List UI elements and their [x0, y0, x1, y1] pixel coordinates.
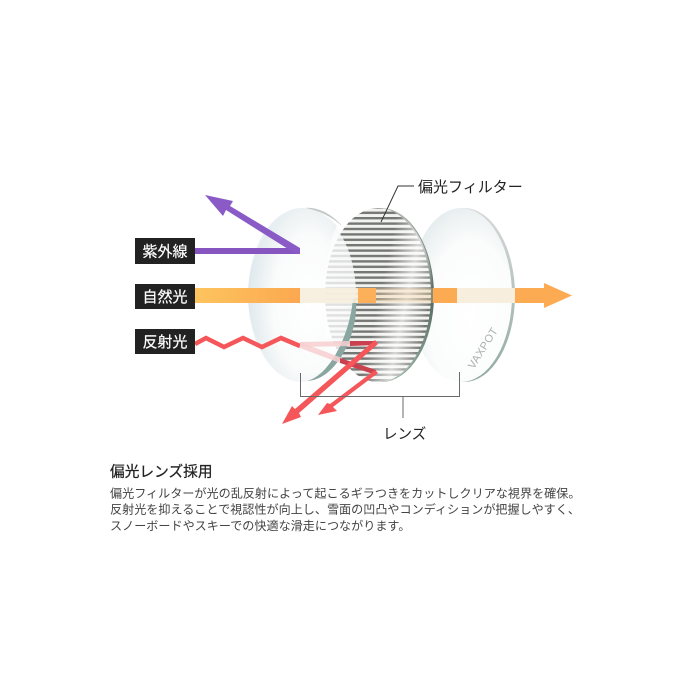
left lens	[248, 208, 356, 382]
right lens	[410, 208, 515, 382]
purple ray: UV	[195, 195, 300, 254]
lens bracket	[300, 372, 460, 418]
body text: 偏光フィルターが光の乱反射によって起こるギラつきをカットしクリアな視界を確保。	[110, 486, 580, 500]
orange ray: natural light	[195, 283, 572, 308]
body text: スノーボードやスキーでの快適な滑走につながります。	[110, 518, 410, 533]
polarizing filter	[325, 208, 434, 382]
tag: natural light: 自然光	[142, 289, 188, 306]
body text: 反射光を抑えることで視認性が向上し、雪面の凹凸やコンディションが把握しやすく、	[110, 502, 580, 516]
lens rim, lower right	[307, 298, 356, 381]
red ray: reflected light	[195, 338, 378, 424]
lens brand mark: VAXPOT	[466, 326, 501, 371]
tag: UV: 紫外線	[142, 244, 188, 260]
tag: reflected light	[135, 329, 195, 354]
tag: natural light	[135, 284, 195, 309]
tag: UV	[135, 238, 195, 264]
body text	[110, 486, 580, 533]
label: lens: レンズ	[383, 426, 426, 443]
lens rim, top	[307, 208, 341, 225]
filter leader line	[381, 186, 414, 222]
tag: reflected light: 反射光	[142, 334, 188, 351]
heading: 偏光レンズ採用	[110, 464, 213, 480]
label: polarizing filter: 偏光フィルター	[418, 179, 523, 196]
